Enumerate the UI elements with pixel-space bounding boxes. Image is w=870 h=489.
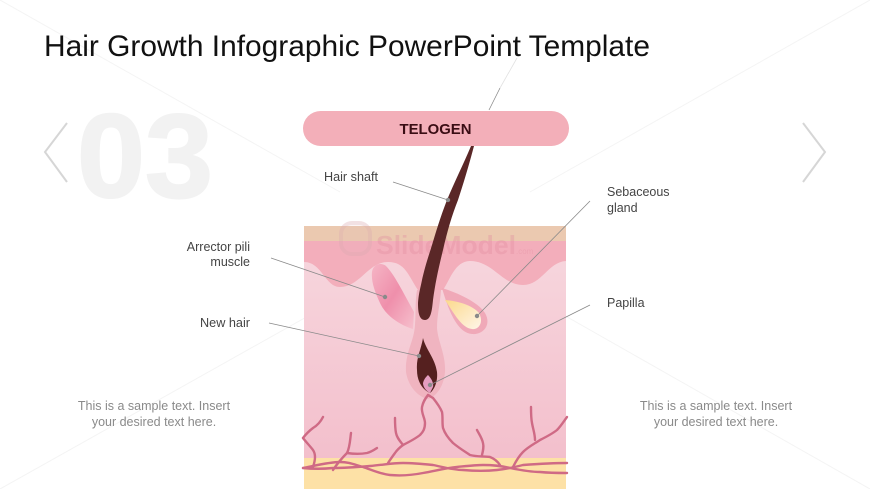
large step number: 03 [77, 90, 213, 223]
label: sebaceous gland: Sebaceous [607, 185, 670, 199]
surface band [304, 226, 566, 241]
dermis layer [304, 241, 566, 459]
watermark: .com [516, 247, 534, 256]
new hair [417, 338, 437, 393]
label leaders [269, 88, 590, 387]
label: arrector pili muscle: muscle [210, 255, 250, 269]
hair shaft [418, 146, 474, 320]
label: arrector pili muscle: Arrector pili [187, 240, 250, 254]
epidermis layer [304, 241, 566, 290]
icon: right chevron [803, 123, 825, 182]
papilla [423, 375, 433, 393]
fat layer [304, 458, 566, 489]
phase pill [303, 111, 569, 146]
label: papilla: Papilla [607, 296, 645, 310]
label: sebaceous gland: gland [607, 201, 638, 215]
title: Hair Growth Infographic PowerPoint Template [44, 30, 650, 63]
icon: left chevron [45, 123, 67, 182]
right sample text: your desired text here. [654, 415, 778, 429]
hair follicle sheath [406, 290, 445, 399]
label: new hair: New hair [200, 316, 250, 330]
sebaceous gland [442, 288, 487, 334]
hair skin diagram [303, 146, 567, 489]
left sample text: This is a sample text. Insert [78, 399, 231, 413]
arrector pili muscle [372, 264, 414, 329]
right sample text: This is a sample text. Insert [640, 399, 793, 413]
watermark [341, 223, 534, 260]
left sample text: your desired text here. [92, 415, 216, 429]
label: hair shaft: Hair shaft [324, 170, 379, 184]
capillaries [303, 395, 567, 475]
watermark: SlideModel [376, 230, 516, 260]
phase pill: TELOGEN [400, 121, 472, 138]
